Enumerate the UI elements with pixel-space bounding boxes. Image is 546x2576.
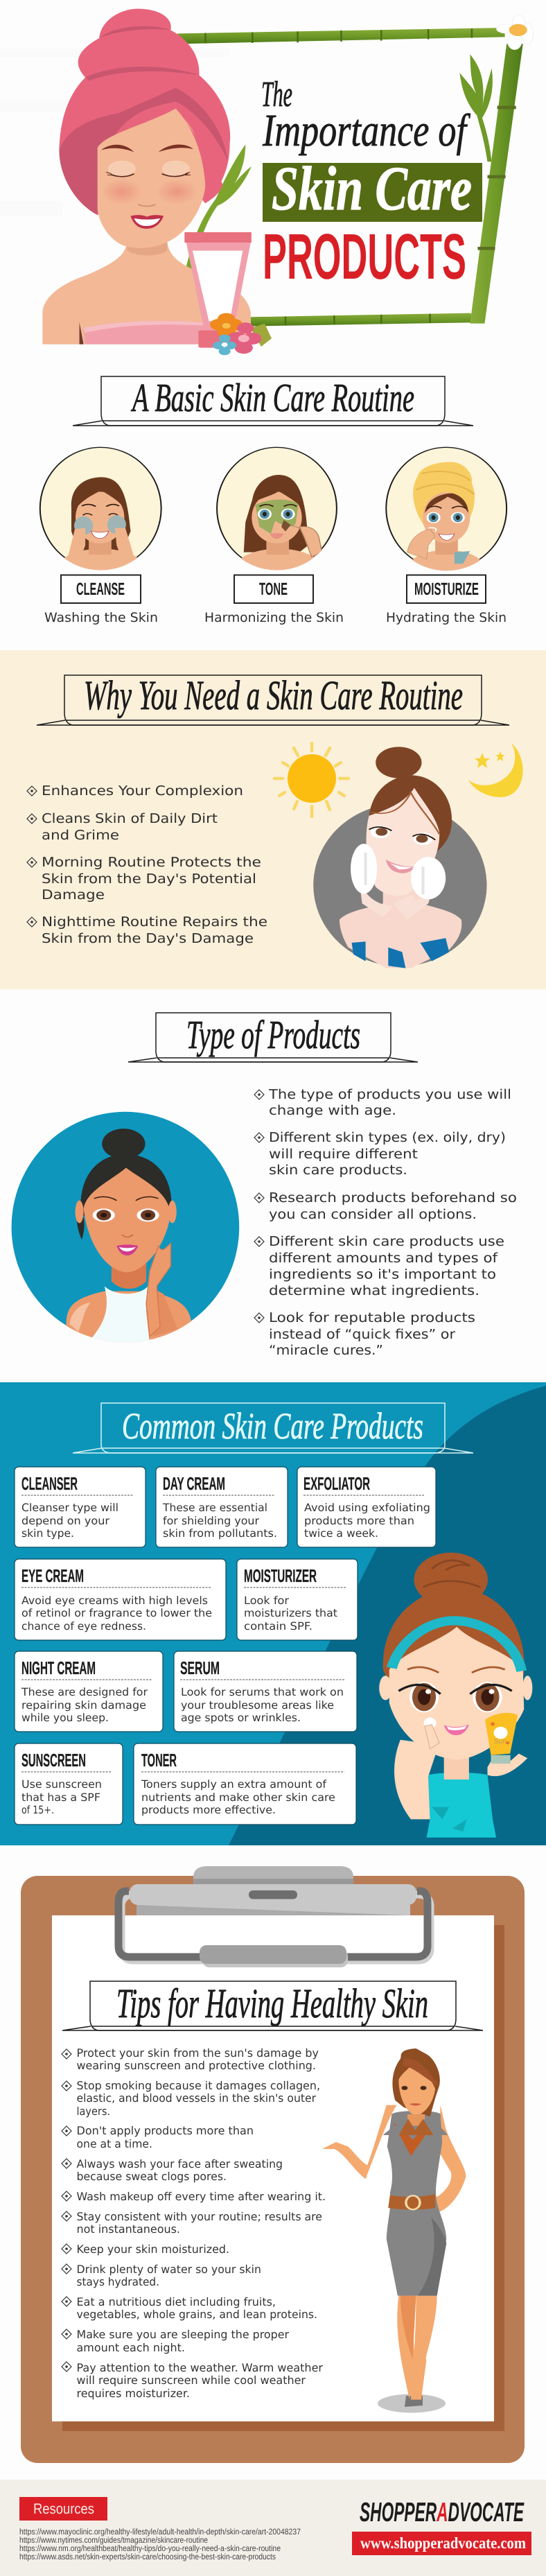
label: resources — [19, 2497, 107, 2521]
bullet: nighttime routine: Nighttime Routine Repairs the — [42, 914, 267, 930]
tip: drink water: stays hydrated. — [76, 2275, 159, 2288]
clipboard clip — [118, 1866, 430, 1967]
heading: common skin care products: Common Skin Care Products — [122, 1405, 423, 1447]
tip: apply products one at a time: one at a time. — [76, 2137, 152, 2150]
bullet: morning routine: Morning Routine Protects the — [42, 855, 261, 870]
bullet: morning routine: Skin from the Day's Potential — [42, 871, 256, 887]
title: Importance of: Importance of — [262, 105, 470, 156]
illustration: woman with hair bun on blue circle — [12, 1112, 239, 1344]
tip: protect skin from sun — [62, 2046, 319, 2072]
bullet: nighttime routine: Skin from the Day's Damage — [42, 931, 254, 946]
tip: nutritious diet: Eat a nutritious diet including fruits, — [76, 2295, 276, 2308]
tip: stay consistent: not instantaneous. — [76, 2222, 180, 2236]
card: cleanser: Cleanser type will — [21, 1502, 118, 1514]
tip: stop smoking: elastic, and blood vessels in the skin's outer — [76, 2091, 316, 2105]
tip: wash after sweating: because sweat clogs pores. — [76, 2170, 227, 2183]
bullet: different ingredients: determine what ingredients. — [269, 1283, 479, 1298]
bullet: nighttime routine — [27, 914, 267, 946]
tip: stop smoking: Stop smoking because it damages collagen, — [76, 2079, 320, 2092]
bullet: cleans skin — [27, 811, 218, 843]
text: source links: https://www.nytimes.com/guides/tmagazine/skincare-routine — [19, 2535, 208, 2545]
illustration: girl applying sunscreen — [379, 1553, 532, 1838]
illustration: cream tube and flowers — [184, 232, 272, 355]
card: night cream: repairing skin damage — [21, 1699, 146, 1712]
label: tone — [234, 575, 313, 603]
icon: cleanse portrait — [39, 446, 162, 571]
card: eye cream — [15, 1559, 226, 1640]
tip: keep skin moisturized: Keep your skin moisturized. — [76, 2243, 229, 2256]
tip: nutritious diet: vegetables, whole grains, and lean proteins. — [76, 2308, 317, 2321]
card: serum: Look for serums that work on — [181, 1686, 344, 1698]
text: source links: https://www.mayoclinic.org/healthy-lifestyle/adult-health/in-depth/skin-care/art-20048237 — [19, 2527, 301, 2536]
card: night cream: NIGHT CREAM — [21, 1657, 96, 1678]
panel: type of products — [12, 1012, 517, 1358]
illustration: bamboo frame — [177, 15, 533, 327]
illustration: woman in pink towel — [42, 9, 251, 345]
panel: common skin care products — [0, 1382, 546, 1845]
tip: proper sleep: amount each night. — [76, 2341, 185, 2354]
bullet: enhances your complexion: Enhances Your Complexion — [42, 783, 243, 799]
tip: stay consistent — [62, 2210, 322, 2236]
tip: protect skin from sun: wearing sunscreen and protective clothing. — [76, 2059, 316, 2072]
tip: stay consistent: Stay consistent with your routine; results are — [76, 2210, 322, 2223]
bullet: research products — [254, 1190, 517, 1222]
card: sunscreen: that has a SPF — [21, 1791, 100, 1804]
tip: proper sleep: Make sure you are sleeping the proper — [76, 2328, 289, 2341]
title: Skin Care banner: Skin Care — [272, 155, 472, 223]
card: toner: Toners supply an extra amount of — [141, 1778, 327, 1791]
icon: moon and stars — [468, 743, 523, 797]
card: moisturizer: Look for — [244, 1594, 290, 1607]
bullet: morning routine — [27, 855, 261, 903]
label: resources: Resources — [33, 2501, 94, 2517]
card: exfoliator: Avoid using exfoliating — [304, 1502, 430, 1514]
bullet: different skin types: Different skin types (ex. oily, dry) — [269, 1130, 506, 1145]
tip: protect skin from sun: Protect your skin from the sun's damage by — [76, 2046, 319, 2060]
text: hydrating the skin: Hydrating the Skin — [386, 611, 507, 625]
card: eye cream: of retinol or fragrance to lower the — [21, 1607, 212, 1619]
bullet: different skin types — [254, 1130, 506, 1178]
card: sunscreen: of 15+. — [21, 1804, 54, 1816]
illustration: standing woman in grey dress — [322, 2048, 466, 2412]
card: eye cream: EYE CREAM — [21, 1565, 84, 1586]
bullet: research products: Research products beforehand so — [269, 1190, 517, 1206]
bullet: reputable products: instead of “quick fixes” or — [269, 1327, 455, 1342]
card: cleanser: depend on your — [21, 1515, 110, 1527]
label: moisturize: MOISTURIZE — [414, 580, 479, 599]
bullet: different skin types: will require different — [269, 1147, 418, 1162]
card: serum — [174, 1651, 357, 1732]
icon: plumeria flower — [497, 15, 533, 50]
text: source links — [19, 2527, 301, 2561]
card: day cream: for shielding your — [163, 1515, 260, 1527]
card: night cream: These are designed for — [21, 1686, 148, 1698]
bullet: product type changes with age: The type of products you use will — [268, 1087, 511, 1102]
label: cleanse — [61, 575, 141, 603]
bullet: reputable products: Look for reputable products — [269, 1310, 475, 1325]
heading: common skin care products — [73, 1403, 473, 1453]
bullet: different ingredients: Different skin care products use — [269, 1234, 504, 1249]
card: toner — [134, 1743, 356, 1825]
card: serum: age spots or wrinkles. — [181, 1712, 301, 1724]
card: cleanser: CLEANSER — [21, 1473, 78, 1494]
label: moisturize — [407, 575, 486, 603]
text: harmonizing the skin: Harmonizing the Skin — [204, 611, 344, 625]
card: eye cream: chance of eye redness. — [21, 1620, 146, 1633]
tip: proper sleep — [62, 2328, 289, 2354]
panel: hero — [0, 9, 533, 355]
card: exfoliator: twice a week. — [304, 1527, 378, 1540]
card: sunscreen: Use sunscreen — [21, 1778, 102, 1791]
bullet: reputable products — [254, 1310, 475, 1358]
tip: pay attention to weather: requires moisturizer. — [76, 2387, 190, 2400]
card: night cream — [15, 1651, 163, 1732]
bullet: different ingredients: ingredients so it's important to — [269, 1267, 496, 1282]
bullet: morning routine: Damage — [42, 887, 105, 903]
label: website url — [352, 2532, 531, 2555]
tip: apply products one at a time: Don't apply products more than — [76, 2124, 254, 2137]
panel: a basic skin care routine — [40, 375, 507, 625]
card: moisturizer — [237, 1559, 358, 1640]
tip: wash after sweating: Always wash your face after sweating — [76, 2157, 283, 2170]
text: source links: https://www.nm.org/healthbeat/healthy-tips/do-you-really-need-a-skin-care-routine — [19, 2543, 281, 2553]
bullet: product type changes with age — [254, 1087, 511, 1118]
panel: footer — [0, 2480, 546, 2576]
card: moisturizer: contain SPF. — [244, 1620, 312, 1633]
card: serum: SERUM — [180, 1657, 220, 1678]
text: washing the skin: Washing the Skin — [44, 611, 158, 625]
bullet: different skin types: skin care products. — [269, 1163, 407, 1178]
tip: pay attention to weather: Pay attention to the weather. Warm weather — [76, 2361, 323, 2374]
heading: type of products: Type of Products — [186, 1012, 360, 1057]
icon: sun — [274, 743, 349, 817]
card: day cream: skin from pollutants. — [163, 1527, 277, 1540]
card: moisturizer: MOISTURIZER — [244, 1565, 317, 1586]
card: cleanser: skin type. — [21, 1527, 74, 1540]
card: exfoliator — [297, 1467, 436, 1547]
tip: drink water — [62, 2263, 261, 2288]
card: eye cream: Avoid eye creams with high levels — [21, 1594, 208, 1607]
illustration: woman washing face — [313, 747, 486, 968]
label: website url: www.shopperadvocate.com — [360, 2534, 526, 2552]
card: exfoliator: EXFOLIATOR — [303, 1473, 370, 1494]
bullet: research products: you can consider all options. — [269, 1207, 477, 1222]
card: cleanser — [15, 1467, 146, 1547]
card: serum: your troublesome areas like — [181, 1699, 334, 1712]
bullet: different ingredients — [254, 1234, 504, 1298]
card: moisturizer: moisturizers that — [244, 1607, 337, 1619]
tip: wash after sweating — [62, 2157, 283, 2183]
heading: a basic skin care routine: A Basic Skin Care Routine — [130, 375, 414, 420]
card: toner: TONER — [141, 1750, 177, 1770]
card: sunscreen: SUNSCREEN — [21, 1750, 86, 1770]
card: toner: products more effective. — [141, 1804, 276, 1816]
card: night cream: while you sleep. — [21, 1712, 109, 1724]
tip: pay attention to weather: will require sunscreen while cool weather — [76, 2374, 306, 2387]
card: toner: nutrients and make other skin care — [141, 1791, 335, 1804]
icon: tone portrait — [216, 446, 337, 571]
bullet: reputable products: “miracle cures.” — [269, 1343, 383, 1358]
icon: moisturize portrait — [386, 447, 507, 587]
card: day cream: DAY CREAM — [163, 1473, 225, 1494]
label: tone: TONE — [259, 580, 288, 599]
heading: a basic skin care routine — [73, 375, 473, 426]
clipboard board — [21, 1876, 525, 2463]
tip: nutritious diet — [62, 2295, 317, 2321]
panel: tips clipboard — [21, 1866, 525, 2463]
tip: drink water: Drink plenty of water so your skin — [76, 2263, 261, 2276]
card: sunscreen — [15, 1743, 123, 1825]
title: The: The — [261, 75, 292, 114]
text: source links: https://www.asds.net/skin-experts/skin-care/choosing-the-best-skin-care-products — [19, 2552, 276, 2561]
heading: type of products — [128, 1012, 418, 1062]
bullet: different ingredients: different amounts and types of — [269, 1251, 498, 1266]
tip: apply products one at a time — [62, 2124, 254, 2150]
tip: stop smoking: layers. — [76, 2105, 110, 2118]
label: cleanse: CLEANSE — [76, 580, 125, 599]
bullet: cleans skin: Cleans Skin of Daily Dirt — [42, 811, 218, 826]
card: exfoliator: products more than — [304, 1515, 414, 1527]
panel: why you need a skin care routine — [0, 650, 546, 989]
bullet: product type changes with age: change with age. — [269, 1103, 396, 1118]
tip: pay attention to weather — [62, 2361, 323, 2400]
icon label: sun: Sun — [494, 1738, 507, 1746]
tip: stop smoking — [62, 2079, 320, 2118]
tip: wash makeup off: Wash makeup off every time after wearing it. — [76, 2190, 326, 2203]
bullet: cleans skin: and Grime — [42, 828, 119, 843]
card: day cream — [156, 1467, 288, 1547]
card: day cream: These are essential — [162, 1502, 267, 1514]
